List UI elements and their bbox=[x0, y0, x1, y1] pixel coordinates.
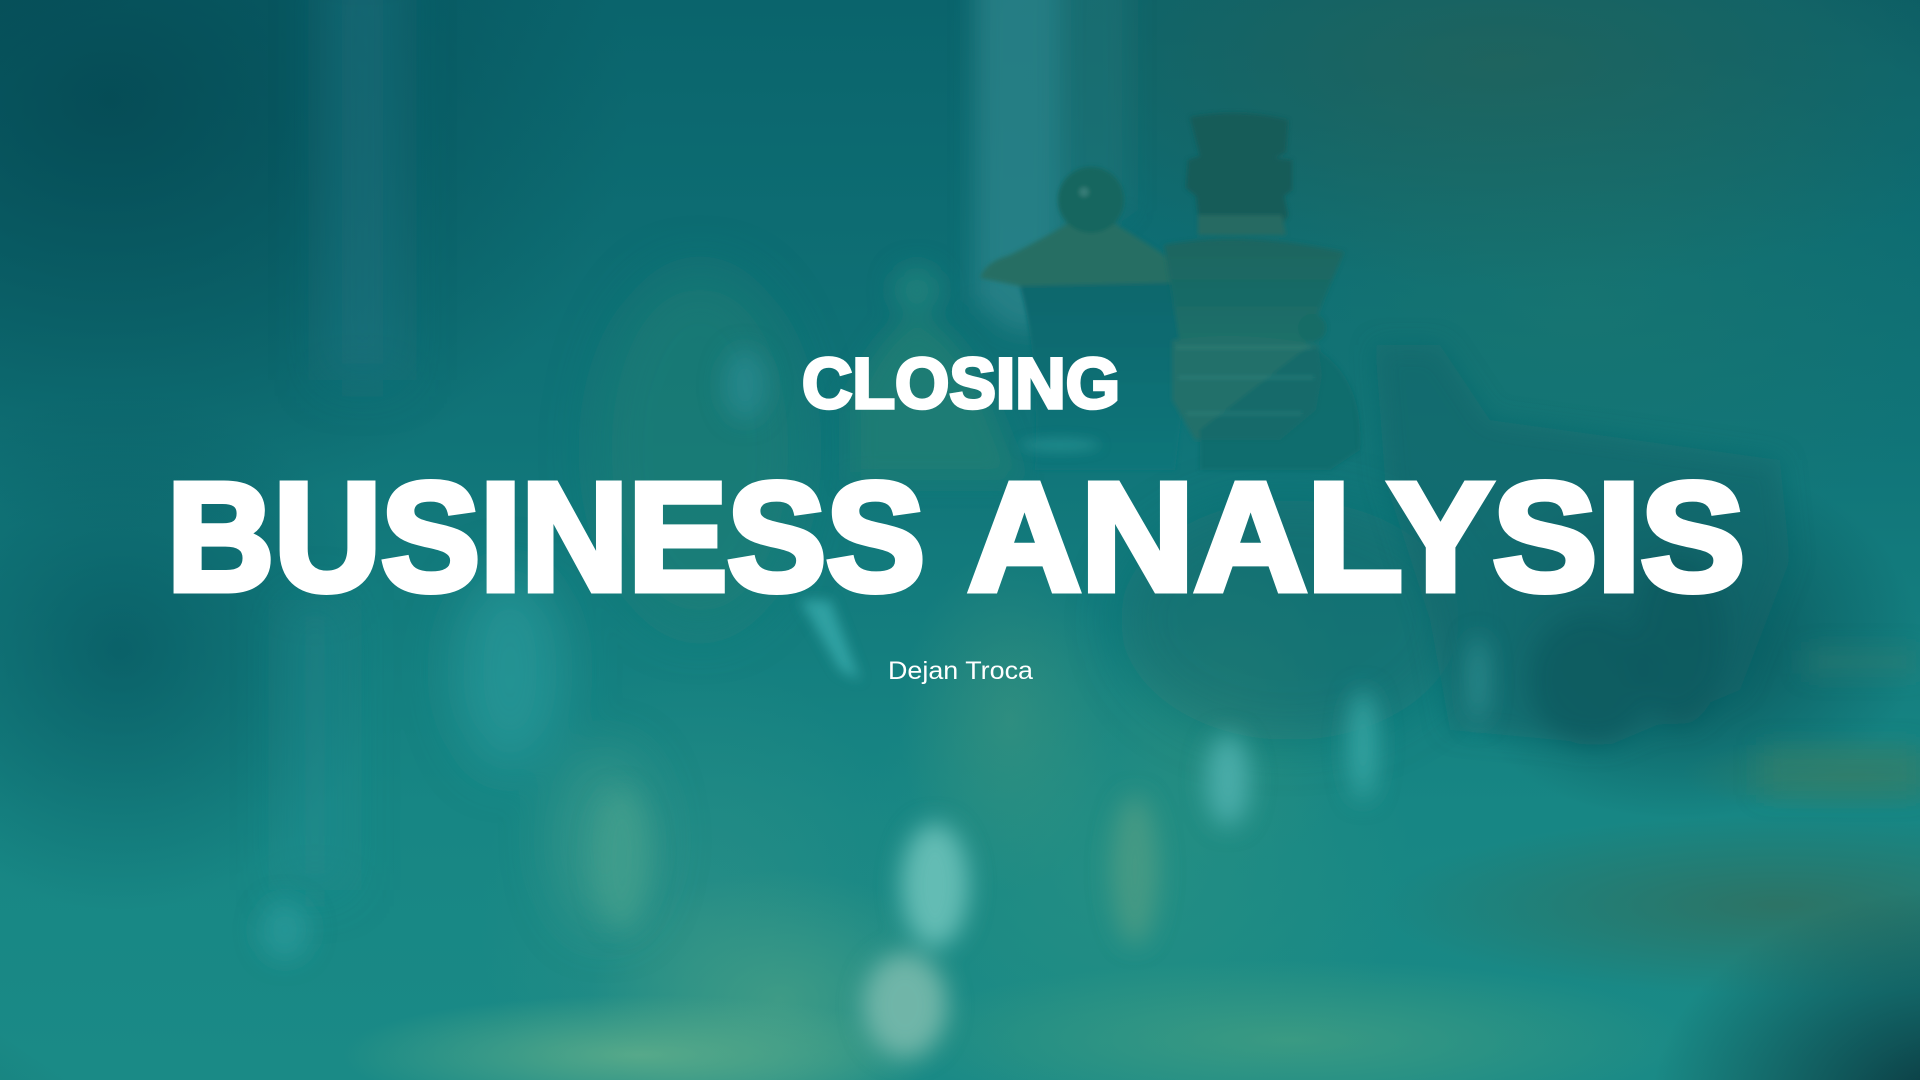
author name: Dejan Troca bbox=[888, 657, 1033, 685]
blurred vertical columns bbox=[285, 0, 1460, 930]
queen piece bbox=[980, 167, 1205, 470]
background pawn bbox=[850, 266, 1020, 480]
king piece bbox=[1164, 113, 1360, 470]
bokeh highlights bbox=[259, 349, 1487, 1057]
distant pieces on the right bbox=[1375, 345, 1920, 795]
main heading: BUSINESS: BUSINESS bbox=[167, 451, 925, 623]
eyebrow heading: CLOSING: CLOSING bbox=[802, 345, 1120, 424]
main heading: ANALYSIS: ANALYSIS bbox=[968, 451, 1745, 623]
